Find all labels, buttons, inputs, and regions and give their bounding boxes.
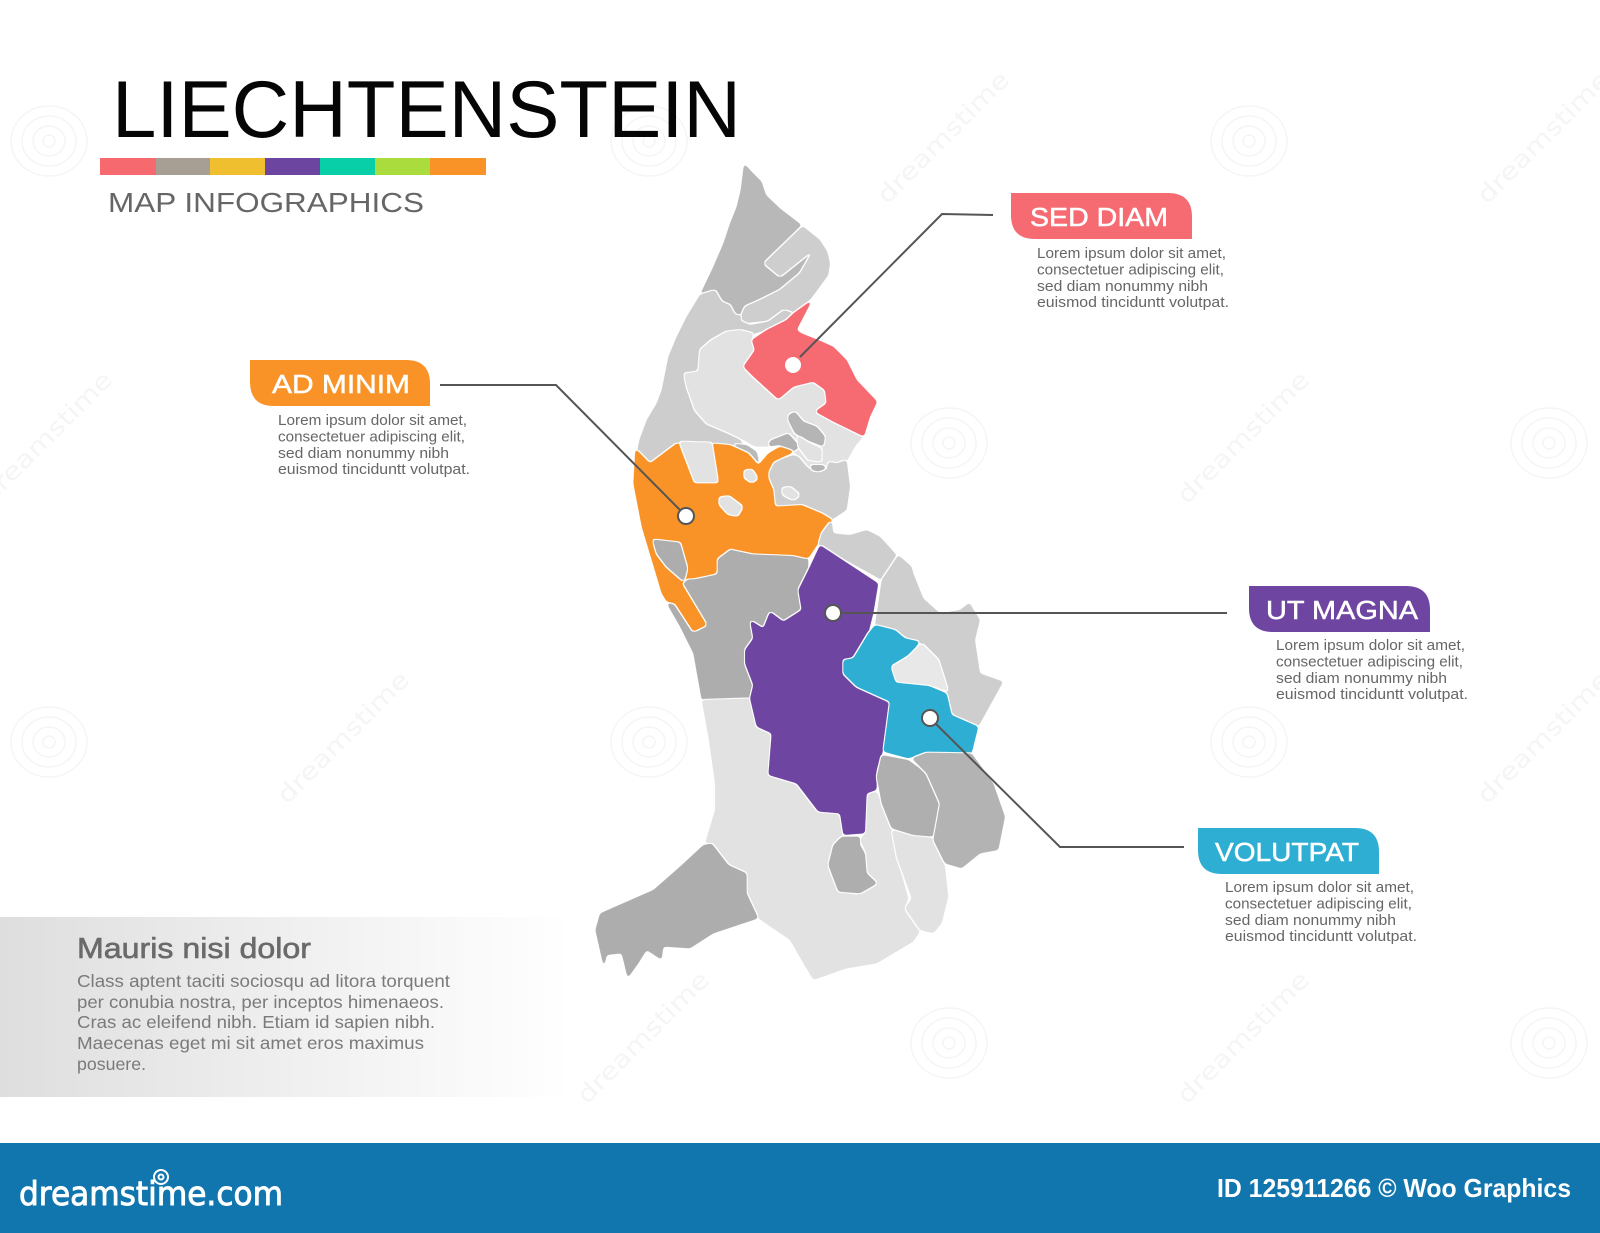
- region: dark enclave south: [828, 837, 877, 893]
- panel body text: Class aptent taciti sociosqu ad litora torquent: [77, 971, 450, 991]
- text: ut magna description: euismod tinciduntt volutpat.: [1276, 687, 1468, 703]
- panel body text: [77, 971, 450, 1074]
- text: sed diam description: sed diam nonummy nibh: [1037, 279, 1208, 295]
- region: light inside blue: [892, 643, 948, 692]
- region: central light: [684, 330, 864, 472]
- region: ad minim highlighted: [633, 443, 833, 632]
- text: ut magna description: Lorem ipsum dolor sit amet,: [1276, 638, 1465, 654]
- region: small blob gray: [768, 433, 800, 452]
- panel heading: Mauris nisi dolor: [77, 933, 311, 965]
- text: volutpat description: consectetuer adipiscing elit,: [1225, 896, 1412, 912]
- text: ut magna description: consectetuer adipiscing elit,: [1276, 654, 1463, 670]
- text: ut magna description: sed diam nonummy nibh: [1276, 671, 1447, 687]
- label: ut magna: UT MAGNA: [1266, 595, 1419, 625]
- icon: logo spiral: [154, 1170, 168, 1184]
- text: ad minim description: sed diam nonummy nibh: [278, 446, 449, 462]
- text: ad minim description: [278, 413, 470, 478]
- watermark layer: dreamstime: [1171, 966, 1315, 1109]
- region: south-west dark: [595, 843, 758, 978]
- callout: volutpat leader: [922, 710, 1184, 847]
- map of Liechtenstein: [595, 163, 1005, 980]
- colour bar: [100, 158, 486, 175]
- text: ut magna description: [1276, 638, 1468, 703]
- callout: ad minim leader: [440, 385, 694, 524]
- region: north dark: [700, 163, 813, 315]
- region: south-central gray: [667, 548, 808, 700]
- region: light south-east: [892, 830, 948, 933]
- region: east gray: [875, 555, 1003, 727]
- label: ad minim: AD MINIM: [272, 369, 410, 399]
- watermark layer: dreamstime: [271, 666, 415, 809]
- region: north light strip: [740, 226, 830, 323]
- text: volutpat description: euismod tinciduntt volutpat.: [1225, 929, 1417, 945]
- label: sed diam: [1011, 193, 1192, 239]
- panel body text: Maecenas eget mi sit amet eros maximus: [77, 1033, 424, 1053]
- region: dark east one: [877, 755, 940, 837]
- region: ut magna highlighted: [745, 545, 890, 835]
- region: orange islet two: [719, 496, 743, 516]
- watermark layer: dreamstime: [1471, 666, 1600, 809]
- panel body text: per conubia nostra, per inceptos himenaeos.: [77, 992, 444, 1012]
- text: volutpat description: Lorem ipsum dolor sit amet,: [1225, 880, 1414, 896]
- label: sed diam: SED DIAM: [1030, 202, 1168, 232]
- watermark layer: dreamstime: [1471, 66, 1600, 209]
- text: ad minim description: Lorem ipsum dolor sit amet,: [278, 413, 467, 429]
- region: sed diam highlighted: [743, 299, 877, 437]
- label: ad minim: [250, 360, 430, 406]
- label: volutpat: VOLUTPAT: [1215, 837, 1359, 867]
- footer bar: [0, 1143, 1600, 1233]
- region: west mid: [637, 290, 794, 463]
- region: light islet: [782, 487, 800, 500]
- footer logo text: dreamstime.com: [19, 1174, 283, 1213]
- label: ut magna: [1249, 586, 1430, 632]
- text: ad minim description: euismod tinciduntt volutpat.: [278, 462, 470, 478]
- label: volutpat: [1198, 828, 1379, 874]
- region: light lower large: [702, 698, 920, 980]
- callout: sed diam leader: [785, 214, 993, 373]
- text: sed diam description: euismod tinciduntt volutpat.: [1037, 295, 1229, 311]
- region: gray enclave: [653, 539, 687, 582]
- text: sed diam description: [1037, 246, 1229, 311]
- watermark layer: dreamstime: [871, 66, 1015, 209]
- callout: ut magna leader: [825, 605, 1227, 621]
- text: volutpat description: [1225, 880, 1417, 945]
- footer credit: ID 125911266 © Woo Graphics: [1217, 1173, 1571, 1203]
- region: tiny gray blob: [810, 465, 827, 472]
- lower map regions: [595, 545, 1005, 980]
- title: LIECHTENSTEIN: [112, 65, 741, 155]
- watermark layer: dreamstime: [1171, 366, 1315, 509]
- region: orange islet one: [744, 469, 758, 483]
- panel body text: posuere.: [77, 1054, 146, 1074]
- region: small dark blob: [788, 412, 825, 447]
- region: small light blob: [797, 435, 822, 462]
- region: light inset: [679, 442, 718, 482]
- region: dark east two: [912, 753, 1005, 868]
- region: east of orange: [768, 455, 850, 520]
- watermark layer: dreamstime: [571, 966, 715, 1109]
- region: volutpat highlighted: [843, 625, 978, 758]
- panel body text: Cras ac eleifend nibh. Etiam id sapien nibh.: [77, 1012, 435, 1032]
- text: sed diam description: consectetuer adipiscing elit,: [1037, 262, 1224, 278]
- text: volutpat description: sed diam nonummy nibh: [1225, 913, 1396, 929]
- upper map regions: [633, 163, 897, 700]
- region: north-east of purple: [818, 520, 897, 580]
- text: ad minim description: consectetuer adipiscing elit,: [278, 430, 465, 446]
- subtitle: MAP INFOGRAPHICS: [108, 187, 424, 218]
- panel: mauris nisi dolor: [0, 917, 570, 1097]
- region: wedge gray: [730, 443, 760, 465]
- text: sed diam description: Lorem ipsum dolor sit amet,: [1037, 246, 1226, 262]
